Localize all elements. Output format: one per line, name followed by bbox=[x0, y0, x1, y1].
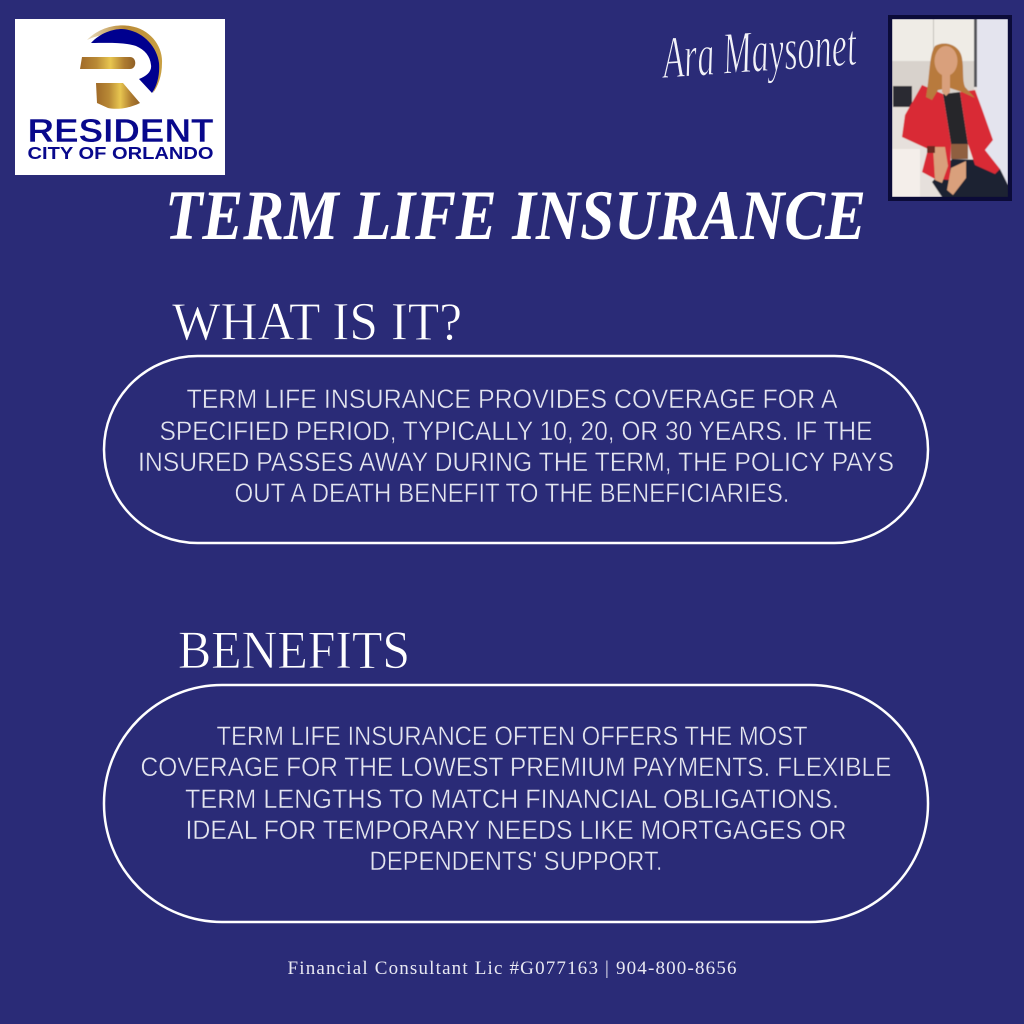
panel: benefits bbox=[104, 685, 928, 922]
text block: benefits list: IDEAL FOR TEMPORARY NEEDS LIKE MORTGAGES OR bbox=[186, 815, 846, 845]
logo: Resident City of Orlando bbox=[15, 19, 225, 175]
footer: licence and phone: Financial Consultant Lic #G077163 | 904-800-8656 bbox=[288, 958, 736, 979]
icon: R emblem bbox=[80, 25, 162, 109]
logo wordmark: RESIDENT bbox=[28, 112, 214, 149]
text block: definition: INSURED PASSES AWAY DURING THE TERM, THE POLICY PAYS bbox=[138, 447, 894, 477]
text block: benefits list: TERM LIFE INSURANCE OFTEN OFFERS THE MOST bbox=[216, 721, 808, 751]
text block: definition: SPECIFIED PERIOD, TYPICALLY 10, 20, OR 30 YEARS. IF THE bbox=[160, 416, 872, 446]
text block: definition: OUT A DEATH BENEFIT TO THE BENEFICIARIES. bbox=[234, 478, 790, 508]
text block: benefits list: TERM LENGTHS TO MATCH FINANCIAL OBLIGATIONS. bbox=[185, 784, 839, 814]
text block: definition bbox=[138, 384, 894, 508]
text block: benefits list bbox=[140, 721, 892, 876]
text block: benefits list: DEPENDENTS' SUPPORT. bbox=[370, 846, 662, 876]
heading: what is it: WHAT IS IT? bbox=[172, 292, 462, 352]
text block: benefits list: COVERAGE FOR THE LOWEST PREMIUM PAYMENTS. FLEXIBLE bbox=[140, 752, 892, 782]
heading: benefits: BENEFITS bbox=[178, 620, 410, 680]
title: TERM LIFE INSURANCE bbox=[165, 177, 866, 255]
panel: what is it bbox=[104, 356, 928, 543]
logo subtitle: CITY OF ORLANDO bbox=[28, 143, 214, 163]
signature: Ara Maysonet bbox=[658, 12, 859, 91]
text block: definition: TERM LIFE INSURANCE PROVIDES COVERAGE FOR A bbox=[186, 384, 838, 414]
portrait photo bbox=[888, 15, 1012, 201]
